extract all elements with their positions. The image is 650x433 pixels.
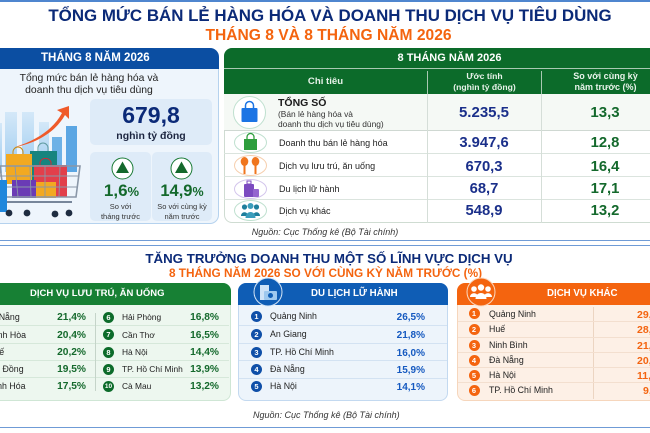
panel heading: DU LỊCH LỮ HÀNH <box>311 288 398 299</box>
card: versus previous year <box>152 152 212 221</box>
row: travel <box>224 177 650 200</box>
list: ranks 6 to 10: 16,5% <box>190 330 219 341</box>
list: ranks 1 to 5: 21,4% <box>57 312 86 323</box>
list: ranks 6 to 10: 10 <box>105 382 112 390</box>
list: ranks 6 to 10: 14,4% <box>190 347 219 358</box>
list: ranks 6 to 10: 8 <box>106 348 111 356</box>
subtitle: THÁNG 8 VÀ 8 THÁNG NĂM 2026 <box>205 27 452 44</box>
list: other services ranks <box>469 308 650 397</box>
list: ranks 6 to 10: TP. Hồ Chí Minh <box>122 364 183 374</box>
list: ranks 6 to 10: Cần Thơ <box>122 330 155 340</box>
sublabel: doanh thu dịch vụ tiêu dùng) <box>278 118 384 128</box>
estimate: 548,9 <box>465 203 503 219</box>
card: versus previous month <box>90 152 151 221</box>
growth: 13,3 <box>590 104 620 121</box>
list: travel ranks: 4 <box>254 364 259 374</box>
list: other services ranks: 4 <box>472 356 476 364</box>
row: accommodation <box>224 154 650 177</box>
list: other services ranks: 5 <box>472 370 476 380</box>
panel heading: DỊCH VỤ LƯU TRÚ, ĂN UỐNG <box>30 288 165 299</box>
section subtitle: 8 THÁNG NĂM 2026 SO VỚI CÙNG KỲ NĂM TRƯỚC (%) <box>169 266 482 280</box>
header: year on year <box>541 71 650 95</box>
label: TỔNG SỐ <box>278 97 326 109</box>
description text: doanh thu dịch vụ tiêu dùng <box>25 85 153 96</box>
list: other services ranks: 3 <box>472 340 476 350</box>
list: travel ranks: 16,0% <box>397 348 425 359</box>
icon: people badge <box>466 278 496 306</box>
panel heading: monthly <box>0 48 219 69</box>
note: năm trước <box>165 212 199 220</box>
illustration: shopping cart with growth chart <box>0 106 81 218</box>
list: other services ranks: Đà Nẵng <box>489 355 524 365</box>
panel: travel <box>238 283 448 401</box>
header: indicator: Chỉ tiêu <box>308 76 343 87</box>
panel heading <box>0 283 231 305</box>
note: So với cùng kỳ <box>157 202 207 211</box>
header: estimate <box>427 71 541 95</box>
list: ranks 1 to 5: 20,4% <box>57 330 86 341</box>
list: ranks 6 to 10: Cà Mau <box>122 381 151 391</box>
list: travel ranks: Đà Nẵng <box>270 364 305 374</box>
header: estimate: Ước tính <box>466 71 503 81</box>
panel heading: DỊCH VỤ KHÁC <box>547 288 618 299</box>
value: 679,8 <box>122 102 180 128</box>
icon: blue bag <box>233 96 266 129</box>
list: ranks 1 to 5: 19,5% <box>57 364 86 375</box>
icon: up triangle <box>170 158 192 180</box>
header: estimate: (nghìn tỷ đồng) <box>453 82 516 92</box>
description text: Tổng mức bán lẻ hàng hóa và <box>20 73 158 84</box>
list: ranks 6 to 10: 16,8% <box>190 312 219 323</box>
row: total <box>224 94 650 131</box>
row: other services <box>234 200 619 221</box>
icon: people <box>234 200 267 221</box>
percent: 1,6% <box>104 181 139 200</box>
panel heading <box>457 283 650 305</box>
list: ranks 6 to 10: Hà Nội <box>122 347 148 357</box>
list: ranks 6 to 10 <box>103 312 219 392</box>
estimate: 670,3 <box>465 159 503 175</box>
list: other services ranks: 2 <box>472 324 476 334</box>
header: year on year: So với cùng kỳ <box>573 71 638 81</box>
note: So với <box>110 202 131 211</box>
header: year on year: năm trước (%) <box>575 82 636 92</box>
list: ranks 1 to 5: 20,2% <box>57 347 86 358</box>
list: travel ranks: TP. Hồ Chí Minh <box>270 347 334 357</box>
column headers <box>224 68 650 94</box>
note <box>101 202 140 220</box>
growth: 16,4 <box>591 159 619 175</box>
icon: green bag <box>234 132 267 153</box>
label: Dịch vụ khác <box>279 206 331 216</box>
unit: nghìn tỷ đồng <box>116 130 186 142</box>
panel heading <box>238 283 448 305</box>
note: tháng trước <box>101 212 140 220</box>
panel: other services <box>457 283 650 401</box>
list: travel ranks: 26,5% <box>397 312 425 323</box>
title: TỔNG MỨC BÁN LẺ HÀNG HÓA VÀ DOANH THU DỊCH VỤ TIÊU DÙNG <box>48 6 612 25</box>
list: other services ranks: Quảng Ninh <box>489 309 536 319</box>
growth: 17,1 <box>591 181 619 197</box>
list: ranks 1 to 5: 17,5% <box>57 381 86 392</box>
list: travel ranks: An Giang <box>270 329 307 339</box>
panel: monthly summary <box>0 48 219 224</box>
icon: up triangle <box>112 158 134 180</box>
icon: luggage badge <box>254 278 282 306</box>
list: travel ranks: 21,8% <box>397 330 425 341</box>
estimate: 5.235,5 <box>459 104 509 121</box>
list: travel ranks: 1 <box>254 312 259 321</box>
label: Dịch vụ lưu trú, ăn uống <box>279 161 375 171</box>
list: travel ranks: 2 <box>254 330 259 338</box>
row: retail <box>224 131 650 154</box>
list: ranks 6 to 10: 13,9% <box>190 364 219 375</box>
source note: bottom: Nguồn: Cục Thống kê (Bộ Tài chính) <box>253 410 400 420</box>
list: other services ranks: Hà Nội <box>489 370 516 380</box>
section title: TĂNG TRƯỞNG DOANH THU MỘT SỐ LĨNH VỰC DỊCH VỤ <box>145 251 513 266</box>
list: travel ranks <box>251 311 425 393</box>
list: ranks 6 to 10: 6 <box>106 312 111 322</box>
list: ranks 1 to 5 <box>0 312 86 392</box>
percent: 14,9% <box>160 182 204 200</box>
list: other services ranks: TP. Hồ Chí Minh <box>489 385 553 395</box>
value card <box>90 99 212 145</box>
list: ranks 6 to 10: Hải Phòng <box>122 312 161 322</box>
list: other services ranks: 1 <box>472 309 476 318</box>
estimate: 68,7 <box>470 181 498 197</box>
list: ranks 6 to 10: 13,2% <box>190 381 219 392</box>
list: travel ranks: Quảng Ninh <box>270 311 317 321</box>
icon: suitcase <box>234 179 267 199</box>
table heading: 8 THÁNG NĂM 2026 <box>398 52 501 64</box>
estimate: 3.947,6 <box>459 135 509 151</box>
panel: accommodation and food <box>0 283 231 401</box>
panel: eight-month table <box>224 48 650 223</box>
list: travel ranks: 14,1% <box>397 382 425 393</box>
list: ranks 6 to 10: 7 <box>106 330 111 339</box>
list: travel ranks: Hà Nội <box>270 381 297 391</box>
icon: cutlery <box>234 155 267 176</box>
growth: 12,8 <box>591 135 619 151</box>
sublabel: (Bán lẻ hàng hóa và <box>278 109 353 119</box>
table heading <box>224 48 650 68</box>
list: ranks 6 to 10: 9 <box>106 364 111 374</box>
list: other services ranks: Huế <box>489 324 505 334</box>
description text <box>20 72 158 96</box>
note <box>157 202 207 220</box>
label: Doanh thu bán lẻ hàng hóa <box>279 138 388 148</box>
list: other services ranks: Ninh Bình <box>489 340 528 350</box>
list: travel ranks: 3 <box>254 348 259 356</box>
list: other services ranks: 6 <box>472 386 476 394</box>
source note: top: Nguồn: Cục Thống kê (Bộ Tài chính) <box>252 227 398 237</box>
growth: 13,2 <box>591 203 619 219</box>
panel heading: monthly: THÁNG 8 NĂM 2026 <box>41 52 150 64</box>
label: Du lịch lữ hành <box>279 184 340 194</box>
list: travel ranks: 5 <box>254 382 259 390</box>
list: travel ranks: 15,9% <box>397 365 425 376</box>
sublabel <box>278 109 384 128</box>
